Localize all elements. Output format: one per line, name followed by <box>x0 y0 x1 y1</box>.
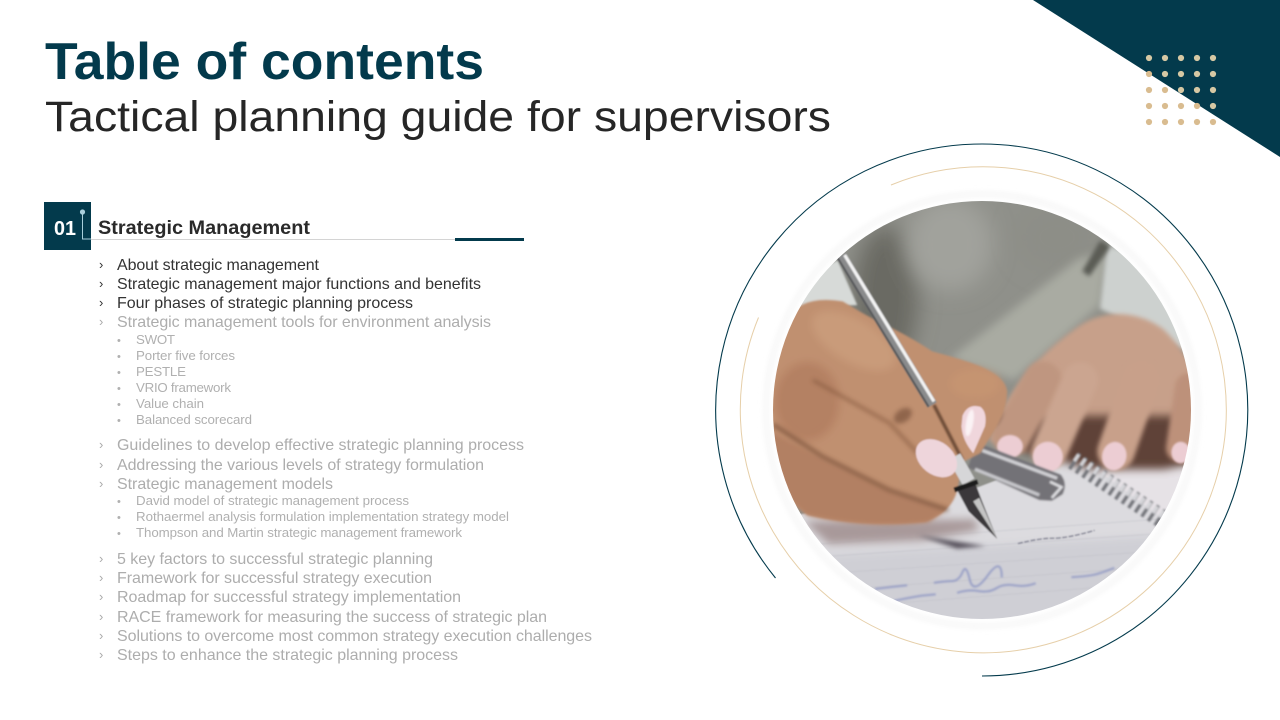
section number badge: 01 <box>54 218 76 240</box>
contents list: Thompson and Martin strategic management framework <box>136 525 462 540</box>
contents list: • <box>117 351 121 363</box>
contents list: › <box>99 257 103 272</box>
contents list: Steps to enhance the strategic planning process <box>117 647 458 664</box>
contents list: RACE framework for measuring the success of strategic plan <box>117 609 547 626</box>
outer navy arc <box>716 144 1248 676</box>
contents list: • <box>117 399 121 411</box>
contents list: › <box>99 314 103 329</box>
contents list: Porter five forces <box>136 348 235 363</box>
contents list: › <box>99 628 103 643</box>
contents list: • <box>117 383 121 395</box>
thumb nail <box>914 438 958 478</box>
pen nib <box>954 482 997 539</box>
contents list: › <box>99 457 103 472</box>
corner triangle <box>1033 0 1280 157</box>
contents list: Roadmap for successful strategy implementation <box>117 589 461 606</box>
inner gold arc <box>740 167 1226 653</box>
right hand <box>989 314 1200 473</box>
contents list: Rothaermel analysis formulation implementation strategy model <box>136 509 509 524</box>
shirt background <box>796 201 1185 515</box>
contents list: Solutions to overcome most common strategy execution challenges <box>117 628 592 645</box>
contents list: Four phases of strategic planning process <box>117 295 413 312</box>
contents list: › <box>99 276 103 291</box>
contents list: › <box>99 476 103 491</box>
right hand nails <box>997 435 1190 473</box>
contents list: Strategic management tools for environment analysis <box>117 314 491 331</box>
contents list: David model of strategic management process <box>136 493 409 508</box>
subtitle: Tactical planning guide for supervisors <box>45 93 831 141</box>
contents list: 5 key factors to successful strategic planning <box>117 551 433 568</box>
contents list: • <box>117 335 121 347</box>
contents list: • <box>117 528 121 540</box>
contents list: About strategic management <box>117 257 320 274</box>
index finger nail <box>961 406 986 453</box>
photo halo ring <box>766 194 1198 626</box>
hand and pen shadows on paper <box>804 519 979 544</box>
contents list: VRIO framework <box>136 380 231 395</box>
contents list: › <box>99 647 103 662</box>
contents list: Guidelines to develop effective strategic planning process <box>117 437 524 454</box>
contents list: Strategic management major functions and benefits <box>117 276 481 293</box>
photo: hand writing with fountain pen <box>768 198 1200 630</box>
closed pen cap <box>968 442 1065 501</box>
title: Table of contents <box>45 33 484 91</box>
pen barrel <box>837 255 969 482</box>
contents list: › <box>99 437 103 452</box>
contents list: • <box>117 367 121 379</box>
section number badge <box>44 202 91 250</box>
contents list: Framework for successful strategy execution <box>117 570 432 587</box>
dot grid <box>1146 55 1216 125</box>
contents list: › <box>99 609 103 624</box>
contents list: • <box>117 415 121 427</box>
contents list: › <box>99 589 103 604</box>
section header: Strategic Management <box>44 202 524 250</box>
contents list: Strategic management models <box>117 476 333 493</box>
contents list <box>99 257 592 664</box>
contents list: Value chain <box>136 396 204 411</box>
notebook paper <box>800 458 1184 560</box>
notebook spiral <box>1073 457 1164 519</box>
contents list: › <box>99 551 103 566</box>
contents list: › <box>99 570 103 585</box>
contents list: • <box>117 496 121 508</box>
contents list: SWOT <box>136 332 175 347</box>
contents list: › <box>99 295 103 310</box>
writing hand <box>768 299 1007 524</box>
contents list: Addressing the various levels of strategy formulation <box>117 457 484 474</box>
contents list: • <box>117 512 121 524</box>
section heading: Strategic Management <box>98 218 311 239</box>
contents list: Balanced scorecard <box>136 412 252 427</box>
contents list: PESTLE <box>136 364 186 379</box>
handwriting marks <box>875 566 1114 602</box>
